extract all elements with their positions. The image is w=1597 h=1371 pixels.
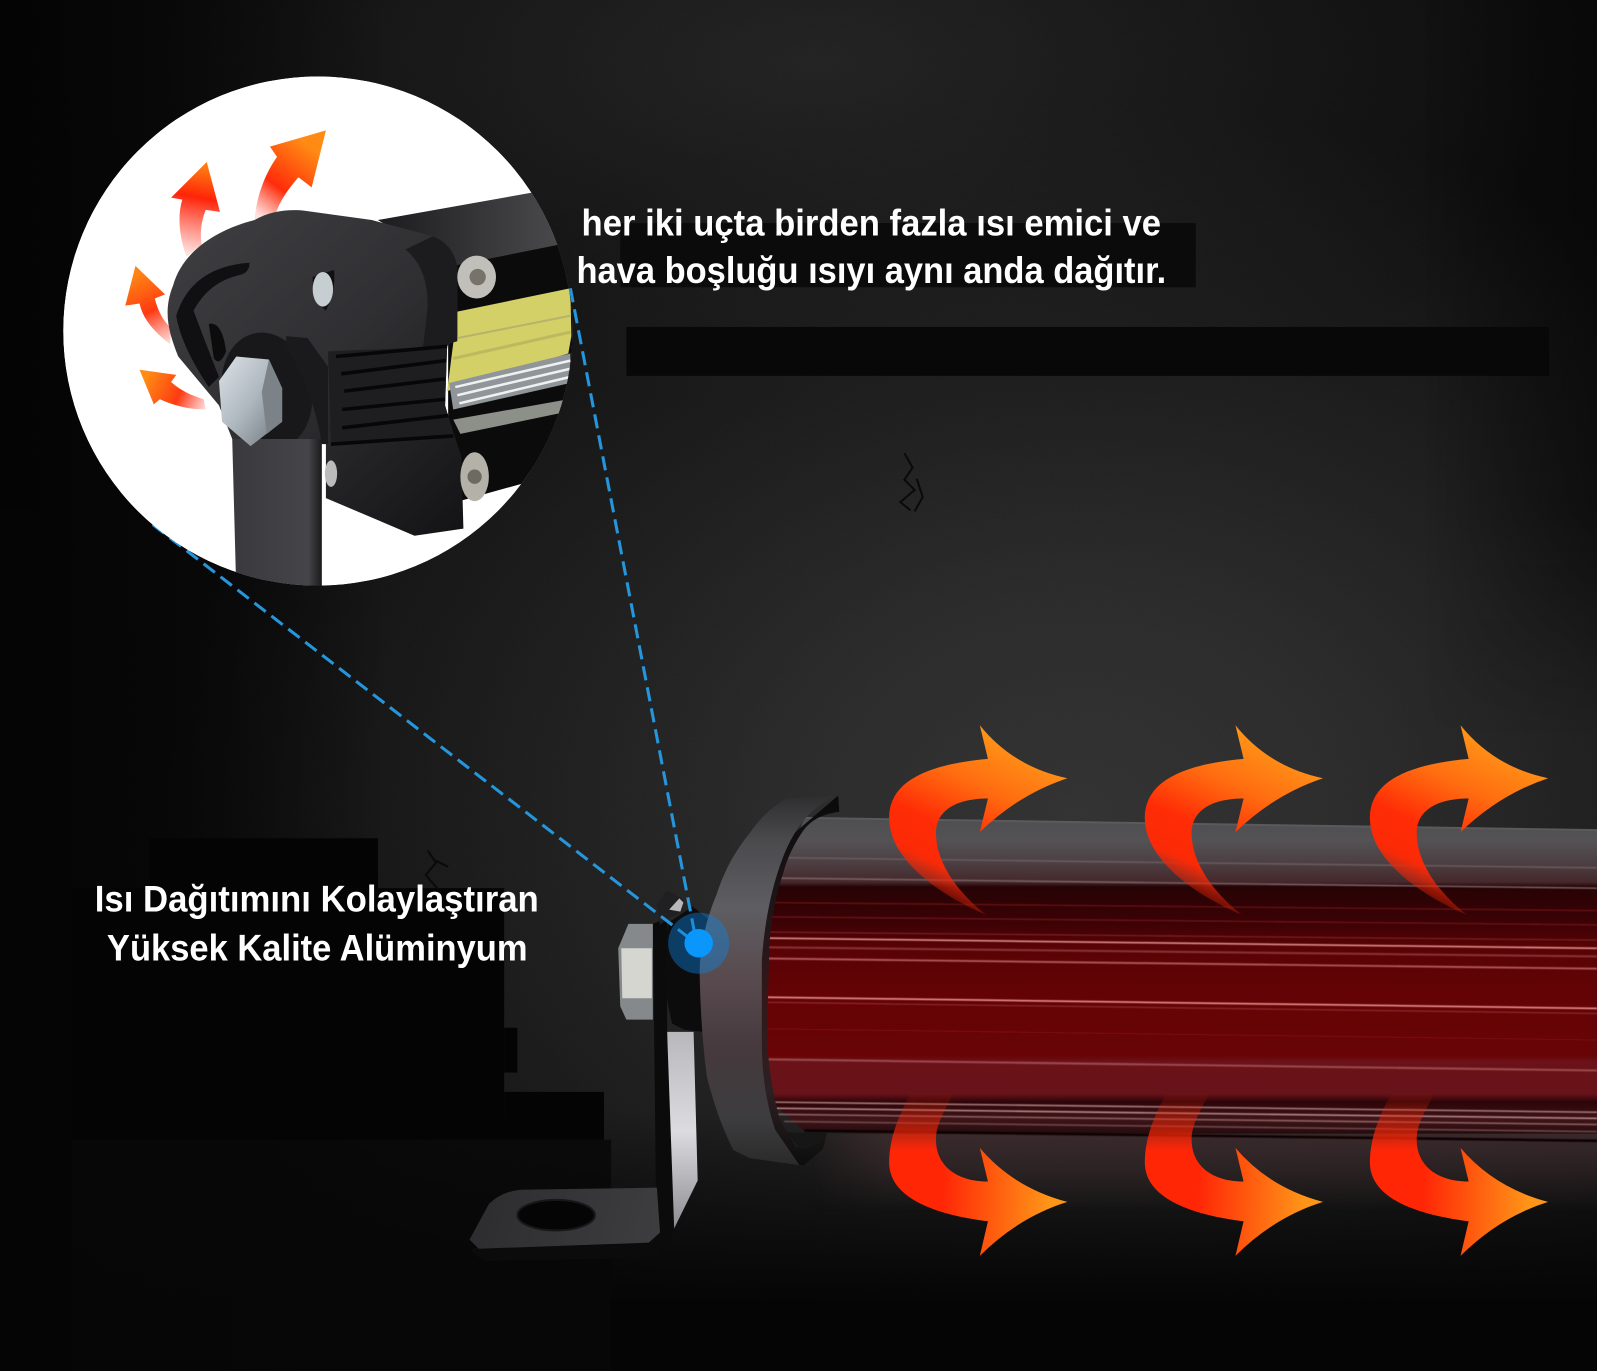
pointer target dot bbox=[668, 913, 729, 974]
pointer: dashed line from callout circle right edge bbox=[570, 288, 695, 933]
callout text: high quality aluminium bbox=[95, 879, 539, 969]
bracket silver inner face bbox=[667, 1032, 698, 1230]
lamp bar top bbox=[378, 192, 558, 266]
arrow top 2 bbox=[1145, 725, 1323, 915]
mounting bracket bbox=[470, 890, 713, 1261]
callout text: heat sinks and air gap: hava boşluğu ısıyı aynı anda dağıtır. bbox=[576, 250, 1166, 291]
top screw bbox=[457, 256, 496, 298]
housing facet bbox=[405, 236, 457, 351]
silver bolt in housing bbox=[313, 270, 334, 311]
pointer: dashed line from callout circle left edge bbox=[153, 525, 695, 942]
arrow top 1 bbox=[889, 725, 1067, 915]
hex bolt bbox=[219, 357, 282, 446]
arrow bottom 1 bbox=[889, 1092, 1067, 1256]
heat arrow 2 bbox=[171, 162, 220, 257]
washer on strap bbox=[222, 332, 312, 439]
yellow led strip bbox=[447, 288, 571, 391]
outer shade of cap bbox=[700, 796, 838, 1165]
lamp bar front bbox=[448, 242, 581, 504]
heat sink bar bbox=[759, 818, 1597, 1215]
background bbox=[222, 0, 1597, 1248]
lower bolt in housing bbox=[325, 460, 337, 487]
heat arrow 3 bbox=[125, 266, 171, 344]
housing slot bbox=[176, 263, 250, 387]
arrow bottom 3 bbox=[1370, 1092, 1548, 1256]
hex nut bbox=[618, 924, 653, 1020]
housing hole bbox=[209, 324, 226, 361]
lamp end cap bbox=[700, 796, 839, 1165]
heat arrow 1 bbox=[255, 130, 326, 220]
bracket strap bbox=[232, 439, 322, 591]
lens ribs bbox=[449, 353, 570, 434]
bracket top loop bbox=[657, 890, 683, 925]
hollow behind cap bbox=[786, 1133, 827, 1149]
arrow bottom 2 bbox=[1145, 1092, 1323, 1256]
bracket foot plate bbox=[470, 1188, 660, 1249]
bracket mounting hole bbox=[517, 1200, 595, 1230]
callout circle: close-up of lamp end bbox=[63, 76, 581, 591]
bracket black edge and foot underside bbox=[470, 917, 674, 1261]
housing bbox=[168, 210, 463, 536]
bottom screw bbox=[460, 452, 489, 501]
strap rib bbox=[286, 336, 328, 444]
callout text: heat sinks and air gap: her iki uçta birden fazla ısı emici ve bbox=[582, 202, 1161, 243]
arrow top 3 bbox=[1370, 725, 1548, 915]
inner rim of cap bbox=[749, 796, 839, 1165]
heat arrows below bar bbox=[889, 1092, 1548, 1256]
heat arrow 4 bbox=[140, 370, 206, 409]
callout text: high quality aluminium: Isı Dağıtımını Kolaylaştıran bbox=[95, 879, 539, 920]
rubber washer bbox=[665, 907, 713, 1032]
cooling ribs bbox=[328, 346, 453, 446]
callout text: high quality aluminium: Yüksek Kalite Alüminyum bbox=[107, 928, 528, 969]
heat arrows above bar bbox=[889, 725, 1548, 915]
callout text: heat sinks and air gap bbox=[576, 202, 1166, 291]
